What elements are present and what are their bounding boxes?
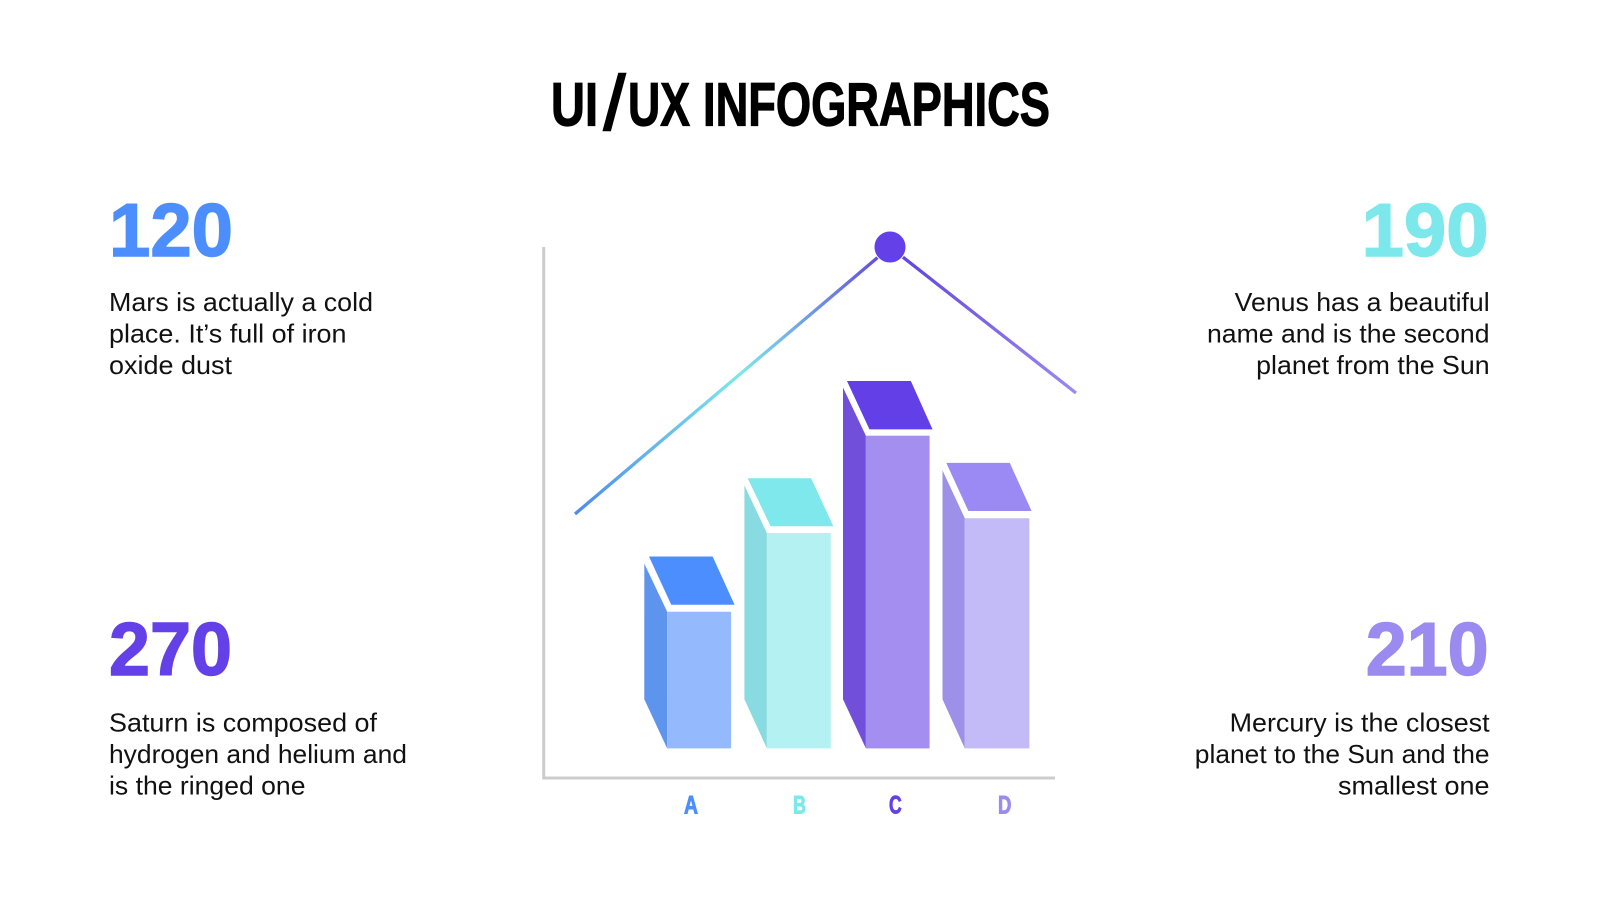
title: UX — [628, 70, 690, 138]
text: Saturn description — [109, 708, 407, 800]
text: Venus description — [1207, 287, 1490, 380]
number: 210: 210 — [1366, 607, 1489, 691]
trend peak marker — [874, 231, 906, 263]
trend line — [575, 247, 1076, 514]
bar D — [942, 463, 1032, 748]
axis labels: B — [793, 792, 806, 820]
bars group — [644, 381, 1032, 748]
axis labels: C — [889, 792, 902, 820]
title: / — [604, 61, 626, 146]
panel: Saturn stat — [109, 607, 407, 800]
axis labels: D — [998, 792, 1011, 820]
bar C — [843, 381, 933, 748]
text: Venus description: planet from the Sun — [1256, 350, 1490, 380]
number: 270: 270 — [109, 607, 232, 691]
text: Mars description: Mars is actually a cold — [109, 287, 373, 317]
title: INFOGRAPHICS — [703, 70, 1050, 138]
text: Venus description: Venus has a beautiful — [1235, 287, 1490, 317]
text: Mars description — [109, 287, 373, 380]
bar B — [744, 478, 833, 748]
text: Saturn description: is the ringed one — [109, 770, 306, 800]
panel: Mars stat — [109, 188, 373, 380]
text: Mercury description — [1195, 708, 1490, 800]
panel: Mercury stat — [1195, 607, 1490, 800]
text: Mars description: oxide dust — [109, 350, 233, 380]
axis labels: A — [684, 792, 698, 820]
text: Mercury description: smallest one — [1338, 770, 1490, 800]
text: Mars description: place. It’s full of iron — [109, 318, 346, 348]
text: Mercury description: Mercury is the closest — [1230, 708, 1490, 738]
bar A — [644, 557, 735, 748]
number: 190: 190 — [1362, 188, 1489, 272]
text: Saturn description: hydrogen and helium and — [109, 739, 407, 769]
axis labels — [684, 792, 1011, 820]
text: Venus description: name and is the second — [1207, 318, 1490, 348]
text: Mercury description: planet to the Sun and the — [1195, 739, 1490, 769]
title: UI — [551, 70, 598, 138]
text: Saturn description: Saturn is composed of — [109, 708, 378, 738]
title — [551, 61, 1050, 146]
chart axes — [544, 247, 1055, 778]
panel: Venus stat — [1207, 188, 1490, 380]
chart: 3D bar chart with trend line — [544, 231, 1076, 820]
number: 120: 120 — [109, 188, 233, 272]
